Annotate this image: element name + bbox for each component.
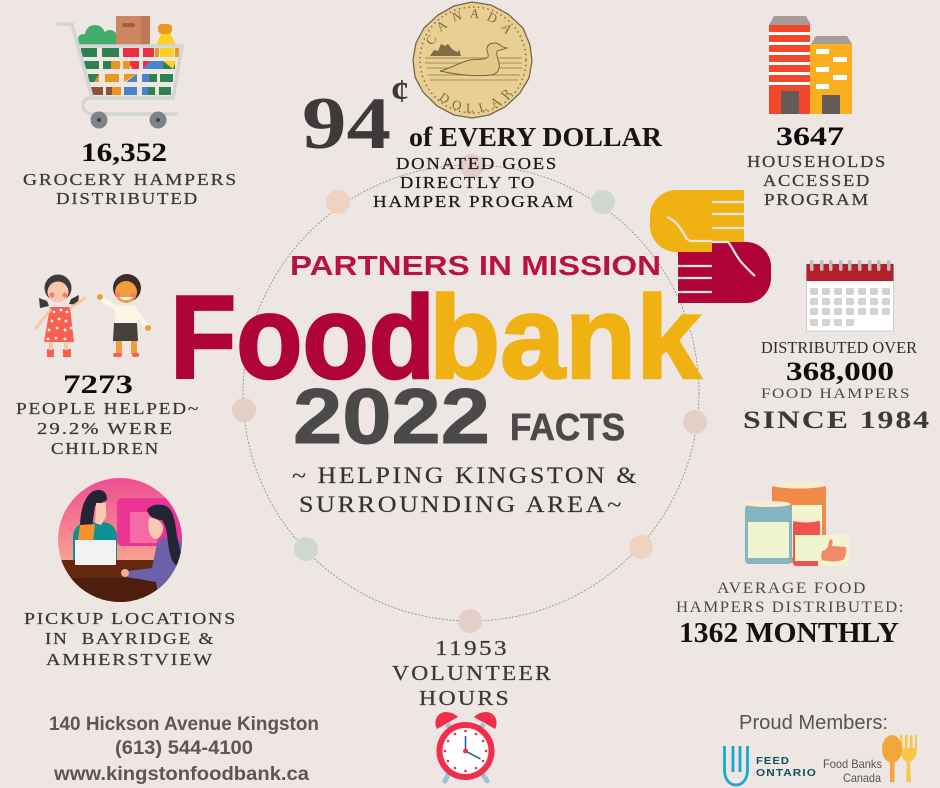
stat: distributed since 1984 — [743, 338, 931, 434]
icon: loonie coin — [412, 1, 533, 119]
icon: loonie coin: DOLLAR — [438, 90, 512, 112]
text: donated goes to hamper program: HAMPER PROGRAM — [373, 192, 575, 211]
icon: calendar — [806, 260, 894, 331]
logo: Feed Ontario — [724, 746, 817, 785]
stat: households — [747, 121, 887, 209]
heading: 2022 facts — [293, 372, 625, 460]
icon: buildings — [769, 16, 852, 114]
stat: households: PROGRAM — [764, 190, 870, 209]
text: pickup locations: PICKUP LOCATIONS — [24, 609, 237, 628]
stat: households: ACCESSED — [763, 171, 871, 190]
icon: alarm clock — [435, 712, 497, 781]
stat: average monthly hampers — [676, 580, 905, 649]
stat: volunteer hours: VOLUNTEER — [392, 661, 553, 685]
stat: people helped: 29.2% WERE — [37, 419, 174, 438]
stat: volunteer hours: 11953 — [435, 636, 509, 660]
heading: 94 cents of every dollar: 94 — [302, 83, 391, 165]
logo: Partners in Mission: PARTNERS IN MISSION — [290, 250, 661, 281]
logo: Food Banks Canada — [823, 735, 917, 785]
text: donated goes to hamper program: DONATED GOES — [396, 154, 558, 173]
text: contact details — [49, 714, 319, 785]
text: contact details: www.kingstonfoodbank.ca — [53, 764, 309, 785]
text: contact details: (613) 544-4100 — [115, 738, 253, 759]
logo: Feed Ontario: FEED — [756, 755, 790, 767]
text: donated goes to hamper program — [373, 154, 575, 211]
stat: people helped: 7273 — [63, 369, 133, 399]
stat: average monthly hampers: AVERAGE FOOD — [717, 580, 867, 597]
logo: Feed Ontario: ONTARIO — [756, 767, 817, 779]
subheading: helping Kingston: SURROUNDING AREA~ — [299, 492, 624, 518]
heading: 94 cents of every dollar — [302, 73, 663, 165]
subheading: helping Kingston — [292, 463, 639, 518]
logo: hands — [650, 190, 771, 303]
stat: volunteer hours — [392, 636, 553, 710]
subheading: helping Kingston: ~ HELPING KINGSTON & — [292, 463, 639, 489]
stat: grocery hampers: GROCERY HAMPERS — [23, 170, 238, 189]
stat: average monthly hampers: 1362 MONTHLY — [679, 618, 899, 649]
stat: people helped — [16, 369, 200, 458]
logo: Food Banks Canada: Food Banks — [823, 757, 882, 771]
logo: Food Banks Canada: Canada — [843, 771, 881, 785]
icon: food cans — [745, 482, 849, 566]
heading: 94 cents of every dollar: of EVERY DOLLAR — [409, 122, 663, 152]
text: pickup locations: IN BAYRIDGE & — [45, 629, 215, 648]
heading: 2022 facts: 2022 — [293, 372, 490, 460]
stat: distributed since 1984: FOOD HAMPERS — [761, 386, 911, 402]
stat: people helped: CHILDREN — [51, 439, 160, 458]
stat: average monthly hampers: HAMPERS DISTRIBUTED: — [676, 599, 905, 616]
heading: 2022 facts: FACTS — [510, 407, 625, 449]
heading: 94 cents of every dollar: ¢ — [391, 73, 409, 110]
text: donated goes to hamper program: DIRECTLY TO — [400, 173, 536, 192]
stat: grocery hampers: DISTRIBUTED — [56, 189, 199, 208]
text: pickup locations — [24, 609, 237, 669]
stat: volunteer hours: HOURS — [419, 686, 511, 710]
stat: grocery hampers — [23, 137, 238, 208]
logo: Foodbank wordmark — [170, 272, 701, 404]
icon: loonie coin: CANADA — [426, 9, 511, 44]
stat: distributed since 1984: DISTRIBUTED OVER — [761, 338, 918, 357]
text: contact details: 140 Hickson Avenue Kingston — [49, 714, 319, 735]
icon: children — [36, 274, 151, 357]
text: pickup locations: AMHERSTVIEW — [46, 650, 214, 669]
logo: Foodbank wordmark: bank — [429, 272, 701, 404]
stat: households: 3647 — [776, 121, 844, 151]
stat: households: HOUSEHOLDS — [747, 152, 887, 171]
stat: grocery hampers: 16,352 — [81, 137, 167, 167]
text: proud members: Proud Members: — [739, 711, 888, 734]
icon: shopping cart — [58, 16, 182, 128]
icon: pickup illustration — [58, 478, 188, 602]
dotted circle with nodes — [232, 154, 707, 633]
stat: people helped: PEOPLE HELPED~ — [16, 399, 200, 418]
stat: distributed since 1984: SINCE 1984 — [743, 407, 931, 434]
stat: distributed since 1984: 368,000 — [786, 356, 894, 386]
logo: Foodbank wordmark: Food — [170, 272, 435, 404]
